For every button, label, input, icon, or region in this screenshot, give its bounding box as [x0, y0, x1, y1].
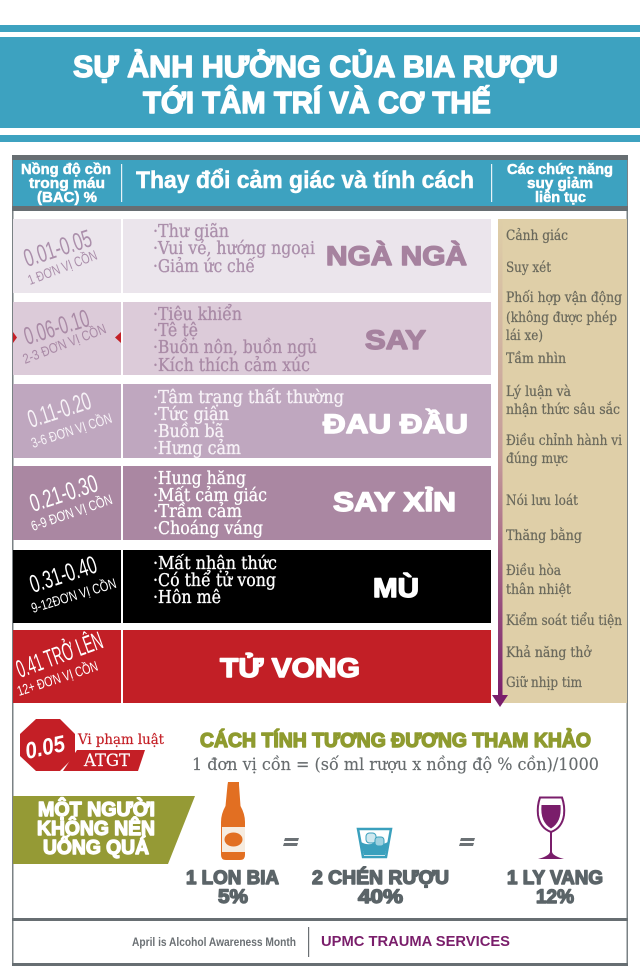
function list: nhận thức sâu sắc	[506, 400, 620, 418]
label: beer: 5%	[218, 887, 248, 908]
row 1: ngà ngà: ·Vui vẻ, hướng ngoại	[153, 239, 315, 259]
label: spirits: 2 CHÉN RƯỢU	[312, 867, 449, 889]
row 4: say xỉn: ·Mất cảm giác	[153, 486, 267, 506]
banner: do not exceed: UỐNG QUÁ	[43, 835, 149, 859]
function list: Kiểm soát tiểu tiện	[506, 611, 622, 629]
row 5: mù: ·Mất nhận thức	[153, 554, 277, 574]
row 1: ngà ngà: ·Giảm ức chế	[153, 257, 255, 277]
function list: Phối hợp vận động	[506, 289, 622, 306]
label: spirits: 40%	[358, 887, 403, 908]
footer: April is Alcohol Awareness Month	[132, 937, 296, 949]
arrow: progressive impairment	[492, 219, 508, 707]
row 4: say xỉn: ·Hung hăng	[153, 469, 246, 489]
banner: do not exceed	[13, 796, 195, 864]
header: feelings: Thay đổi cảm giác và tính cách	[136, 167, 474, 194]
row 5: mù: ·Hôn mê	[153, 588, 221, 608]
function list: Cảnh giác	[506, 227, 568, 244]
label: beer: 1 LON BIA	[186, 868, 279, 889]
row 5: mù: MÙ	[373, 572, 419, 603]
callout: 0.05 stop sign: 0.05	[23, 730, 68, 764]
header: functions	[507, 161, 613, 206]
row 3: đau đầu: ĐAU ĐẦU	[323, 408, 468, 439]
header: BAC: Nồng độ cồn	[21, 161, 111, 178]
title: TỚI TÂM TRÍ VÀ CƠ THẾ	[143, 84, 491, 120]
function list	[506, 227, 622, 691]
header: functions: suy giảm	[527, 175, 593, 192]
row 3: đau đầu: 0.11-0.20	[24, 387, 95, 434]
function list: đúng mực	[506, 451, 568, 467]
callout: 0.05 stop sign: Vi phạm luật	[77, 732, 164, 748]
function list: (không được phép	[506, 310, 617, 326]
panel: impaired functions	[492, 219, 627, 707]
row 3: đau đầu	[13, 384, 491, 459]
label: wine: 12%	[536, 887, 574, 908]
label: beer	[186, 868, 279, 908]
header: functions: Các chức năng	[507, 161, 613, 178]
function list: Thăng bằng	[506, 526, 582, 544]
row 3: đau đầu: ·Hưng cảm	[153, 439, 241, 459]
row 2: say: 0.06-0.10	[21, 304, 93, 351]
equals sign	[459, 838, 475, 846]
function list: Điều chỉnh hành vi	[506, 432, 622, 449]
row 1: ngà ngà	[13, 219, 491, 293]
header: BAC	[21, 161, 111, 206]
row 2: say	[13, 302, 491, 376]
function list: Khả năng thở	[506, 644, 592, 661]
footer: UPMC TRAUMA SERVICES	[321, 933, 510, 950]
title	[73, 48, 558, 120]
label: spirits	[312, 867, 449, 908]
row 4: say xỉn: 6-9 ĐƠN VỊ CỒN	[28, 490, 114, 534]
row 5: mù: 0.31-0.40	[26, 551, 100, 599]
footer	[132, 927, 510, 957]
formula: 1 đơn vị cồn = (số ml rượu x nồng độ % cồn)/1000	[192, 755, 599, 775]
row 1: ngà ngà: 0.01-0.05	[20, 224, 95, 273]
row 2: say: ·Tê tệ	[153, 321, 198, 341]
title: SỰ ẢNH HƯỞNG CỦA BIA RƯỢU	[73, 48, 558, 84]
label: wine: 1 LY VANG	[507, 868, 603, 889]
function list: lái xe)	[506, 328, 543, 344]
row 1: ngà ngà: 1 ĐƠN VỊ CỒN	[25, 246, 99, 288]
equals sign	[283, 838, 299, 846]
row 4: say xỉn: ·Trầm cảm	[153, 502, 242, 522]
row 6: tử vong	[12, 625, 491, 703]
callout: 0.05 stop sign	[20, 719, 164, 771]
row 3: đau đầu: 3-6 ĐƠN VỊ CỒN	[29, 409, 114, 451]
banner: do not exceed: MỘT NGƯỜI	[38, 797, 155, 821]
row 2: say: ·Kích thích cảm xúc	[153, 356, 310, 376]
marker: legal limit	[13, 332, 121, 343]
title banner	[0, 25, 640, 142]
function list: Giữ nhịp tim	[506, 675, 582, 691]
row 2: say: ·Tiêu khiển	[153, 305, 242, 325]
row 2: say: 2-3 ĐƠN VỊ CỒN	[20, 319, 108, 367]
function list: Điều hòa	[506, 562, 561, 579]
row 5: mù: 9-12ĐƠN VỊ CỒN	[29, 574, 118, 616]
callout: 0.05 stop sign: ATGT	[83, 751, 131, 771]
row 4: say xỉn: 0.21-0.30	[26, 469, 101, 518]
row 6: tử vong: TỬ VONG	[220, 651, 360, 683]
header: BAC: trong máu	[29, 175, 105, 192]
banner: do not exceed: KHÔNG NÊN	[37, 816, 155, 840]
row 5: mù	[13, 550, 491, 623]
function list: Suy xét	[506, 260, 551, 276]
row 3: đau đầu: ·Tâm trạng thất thường	[153, 388, 344, 408]
row 1: ngà ngà: ·Thư giãn	[153, 222, 229, 242]
row 3: đau đầu: ·Tức giận	[153, 405, 229, 425]
row 4: say xỉn: SAY XỈN	[333, 485, 456, 517]
header: BAC: (BAC) %	[37, 189, 97, 206]
function list: Lý luận và	[506, 383, 571, 400]
row 2: say: ·Buồn nôn, buồn ngủ	[153, 338, 317, 358]
row 4: say xỉn: ·Choáng váng	[153, 519, 263, 539]
table header	[13, 160, 627, 206]
label: wine	[507, 868, 603, 908]
heading: equivalence: CÁCH TÍNH TƯƠNG ĐƯƠNG THAM KHẢO	[200, 729, 591, 752]
row 5: mù: ·Có thể tử vong	[153, 571, 276, 591]
icon: wine glass	[538, 798, 564, 859]
row 6: tử vong: 0.41 TRỞ LÊN	[12, 625, 107, 684]
function list: thân nhiệt	[506, 582, 571, 598]
icon: whisky glass	[358, 829, 391, 857]
row 3: đau đầu: ·Buồn bã	[153, 422, 224, 442]
row 1: ngà ngà: NGÀ NGÀ	[326, 240, 467, 271]
icon: beer bottle	[221, 782, 245, 860]
function list: Nói lưu loát	[506, 493, 578, 509]
header: functions: liên tục	[535, 189, 586, 206]
table frame	[12, 155, 628, 966]
row 2: say: SAY	[365, 325, 426, 355]
function list: Tầm nhìn	[506, 350, 566, 367]
row 4: say xỉn	[13, 466, 491, 540]
row 6: tử vong: 12+ ĐƠN VỊ CỒN	[15, 657, 100, 699]
